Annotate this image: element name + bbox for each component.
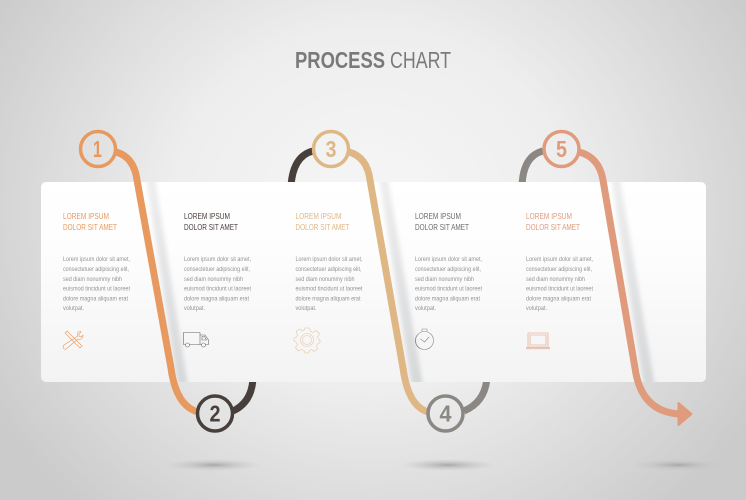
body 5: dolore magna aliquam erat: [526, 296, 591, 302]
white card: [41, 182, 706, 382]
icon: stopwatch: [415, 329, 434, 350]
body 3: volutpat.: [296, 305, 317, 312]
arrow: step 5 to end: [579, 152, 692, 425]
body 2: dolore magna aliquam erat: [184, 296, 249, 302]
body 2: consectetuer adipiscing elit,: [184, 266, 250, 273]
heading 5: DOLOR SIT AMET: [526, 223, 580, 232]
body 5: sed diam nonummy nibh: [526, 276, 585, 283]
strand: step 1 to 2: [116, 152, 198, 412]
heading 4: LOREM IPSUM: [415, 212, 461, 221]
body 4: euismod tincidunt ut laoreet: [415, 286, 482, 292]
body 1: volutpat.: [63, 305, 84, 312]
panel: step 5: [526, 212, 593, 349]
body 4: consectetuer adipiscing elit,: [415, 266, 481, 273]
body 3: consectetuer adipiscing elit,: [296, 266, 362, 273]
icon: tools: [63, 331, 83, 349]
body 2: volutpat.: [184, 305, 205, 312]
heading 3: LOREM IPSUM: [296, 212, 342, 221]
heading 3: DOLOR SIT AMET: [296, 223, 350, 232]
panel: step 4: [415, 212, 482, 350]
panel: step 2: [184, 212, 251, 347]
step 4 marker: [428, 396, 463, 431]
heading 1: DOLOR SIT AMET: [63, 223, 117, 232]
heading 1: LOREM IPSUM: [63, 212, 109, 221]
body 5: volutpat.: [526, 305, 547, 312]
step 5 marker: 5: [556, 136, 567, 162]
body 5: Lorem ipsum dolor sit amet,: [526, 256, 593, 263]
body 3: Lorem ipsum dolor sit amet,: [296, 256, 363, 263]
step 4 marker: 4: [440, 400, 452, 426]
body 2: sed diam nonummy nibh: [184, 276, 243, 283]
step 3 marker: [314, 132, 348, 166]
body 3: euismod tincidunt ut laoreet: [296, 286, 363, 292]
body 1: consectetuer adipiscing elit,: [63, 266, 129, 273]
icon: truck: [184, 332, 208, 347]
heading 5: LOREM IPSUM: [526, 212, 572, 221]
step 5 marker: [544, 132, 579, 166]
body 1: euismod tincidunt ut laoreet: [63, 286, 130, 292]
body 3: sed diam nonummy nibh: [296, 276, 355, 283]
icon: gear: [294, 328, 320, 353]
panel: step 3: [294, 212, 363, 353]
step 2 marker: 2: [210, 400, 220, 426]
step 1 marker: 1: [93, 136, 102, 162]
body 5: euismod tincidunt ut laoreet: [526, 286, 593, 292]
body 3: dolore magna aliquam erat: [296, 296, 361, 302]
step 3 marker: 3: [326, 136, 336, 162]
step 1 marker: [80, 132, 116, 166]
body 4: dolore magna aliquam erat: [415, 296, 480, 302]
body 4: Lorem ipsum dolor sit amet,: [415, 256, 482, 263]
connector arcs behind the card: [233, 151, 543, 411]
heading 2: LOREM IPSUM: [184, 212, 230, 221]
body 4: volutpat.: [415, 305, 436, 312]
step 2 marker: [198, 396, 232, 431]
body 1: Lorem ipsum dolor sit amet,: [63, 256, 130, 263]
panel: step 1: [63, 212, 130, 349]
body 1: sed diam nonummy nibh: [63, 276, 122, 283]
body 1: dolore magna aliquam erat: [63, 296, 128, 302]
body 4: sed diam nonummy nibh: [415, 276, 474, 283]
icon: laptop: [526, 333, 550, 349]
ground shadows: [165, 459, 726, 471]
strand: step 3 to 4: [349, 152, 428, 412]
title: PROCESS: [295, 47, 385, 73]
body 2: euismod tincidunt ut laoreet: [184, 286, 251, 292]
heading 4: DOLOR SIT AMET: [415, 223, 469, 232]
heading 2: DOLOR SIT AMET: [184, 223, 238, 232]
title: CHART: [390, 47, 451, 73]
fold shadows: [146, 178, 655, 386]
body 5: consectetuer adipiscing elit,: [526, 266, 592, 273]
body 2: Lorem ipsum dolor sit amet,: [184, 256, 251, 263]
